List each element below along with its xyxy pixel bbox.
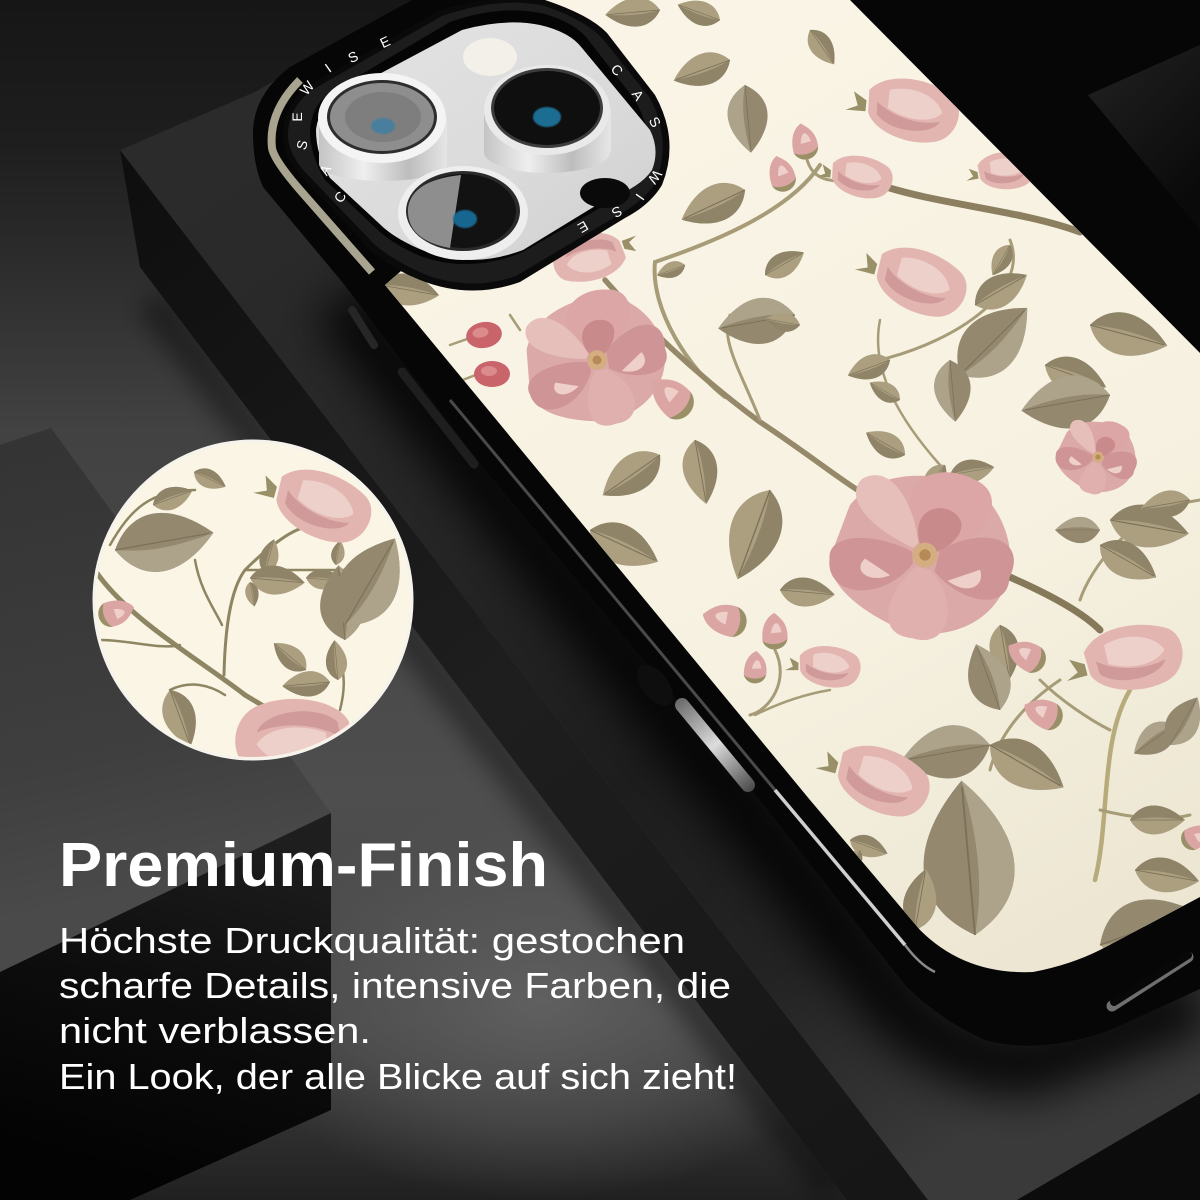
printed screen surface with floral pattern	[385, 0, 1200, 972]
ring lettering: S	[345, 48, 361, 66]
side button: silent switch	[352, 310, 374, 345]
body text: Ein Look, der alle Blicke auf sich zieht!	[59, 1056, 737, 1097]
lens top-left	[318, 73, 447, 181]
ring lettering: E	[289, 112, 305, 122]
lens bottom	[398, 166, 528, 260]
ring lettering: S	[609, 203, 625, 221]
dark corner block top right	[1088, 45, 1200, 230]
ring lettering: S	[646, 114, 664, 130]
inset leaves	[114, 468, 400, 744]
ring lettering: A	[629, 87, 648, 104]
plinth front face	[120, 150, 928, 1200]
large roses	[464, 64, 1200, 854]
ring lettering: C	[330, 188, 349, 206]
ring lettering: A	[316, 161, 335, 178]
lidar sensor	[580, 178, 630, 208]
camera plate glass	[316, 22, 656, 260]
phone shadow	[340, 300, 1200, 1065]
ring lettering: I	[632, 191, 648, 203]
camera island	[272, 0, 670, 291]
inset magnifier circle	[94, 441, 420, 777]
leaves	[377, 0, 1200, 973]
left block front	[0, 813, 331, 1200]
ring lettering	[289, 33, 665, 236]
flash	[463, 38, 517, 76]
side button: camera control	[682, 705, 748, 785]
ring lettering: W	[644, 167, 665, 188]
body text: scharfe Details, intensive Farben, die	[59, 965, 731, 1006]
soft shadow of the plinth on the floor	[150, 300, 835, 1190]
charging port	[1112, 955, 1188, 1006]
camera ring	[283, 0, 670, 291]
case body	[253, 0, 1200, 1046]
body text: nicht verblassen.	[59, 1010, 371, 1051]
stems	[450, 150, 1200, 880]
ring lettering: E	[377, 33, 393, 51]
ring lettering: W	[297, 77, 318, 98]
ring lettering: S	[293, 138, 311, 152]
body text: Höchste Druckqualität: gestochen	[59, 920, 685, 961]
printed strip around the island	[272, 80, 372, 272]
camera control recess	[630, 658, 680, 712]
inset stems	[97, 490, 360, 710]
inset blooms	[254, 470, 372, 543]
ring lettering: I	[322, 60, 334, 76]
side button: volume	[402, 372, 474, 464]
body text	[59, 920, 737, 1097]
title: Premium-Finish	[59, 831, 548, 900]
lens top-right	[484, 65, 611, 173]
left block top	[0, 428, 331, 972]
ring lettering: E	[575, 218, 591, 236]
phone in floral case	[253, 0, 1200, 1046]
ring lettering: C	[608, 61, 626, 79]
camera ring lettering band	[288, 3, 663, 284]
